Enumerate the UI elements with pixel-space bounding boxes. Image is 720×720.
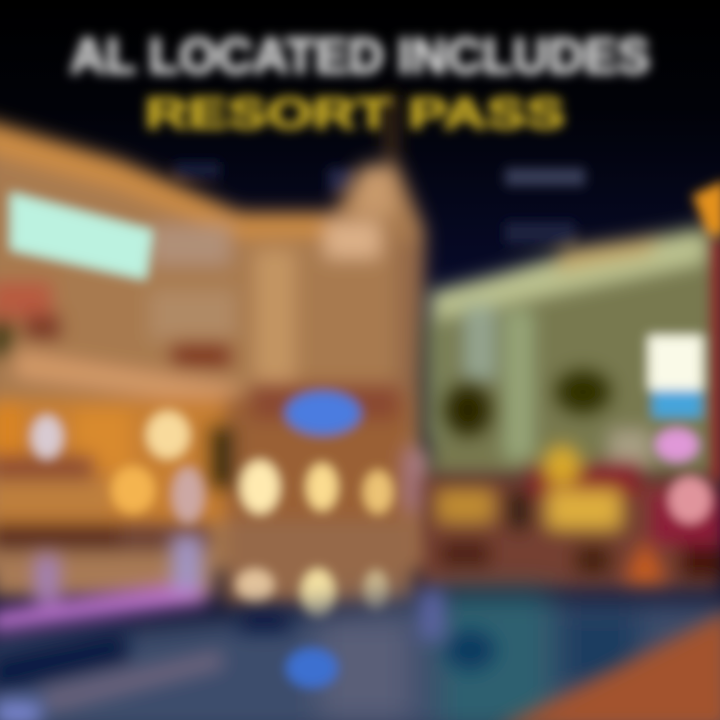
right LED sign bbox=[648, 240, 720, 524]
title line two: RESORT PASS bbox=[145, 89, 565, 138]
blue pool reflection bbox=[286, 648, 338, 688]
sky light patches bbox=[175, 162, 585, 244]
blue sign bbox=[285, 391, 361, 435]
right palm trees bbox=[444, 370, 611, 436]
left hotel building bbox=[0, 95, 440, 570]
right hotel building bbox=[425, 225, 720, 480]
wooden deck bbox=[495, 610, 720, 720]
warm glowing windows bbox=[31, 411, 393, 617]
pool dark reflection bbox=[0, 590, 495, 720]
orange corner tower bbox=[692, 180, 720, 235]
pool water bbox=[0, 590, 720, 720]
lower facade and lights bbox=[0, 282, 430, 605]
pink pool edge lights bbox=[0, 535, 208, 632]
title line one: AL LOCATED INCLUDES bbox=[70, 28, 650, 84]
right casino front bbox=[420, 445, 720, 590]
left hotel billboard bbox=[10, 192, 153, 280]
